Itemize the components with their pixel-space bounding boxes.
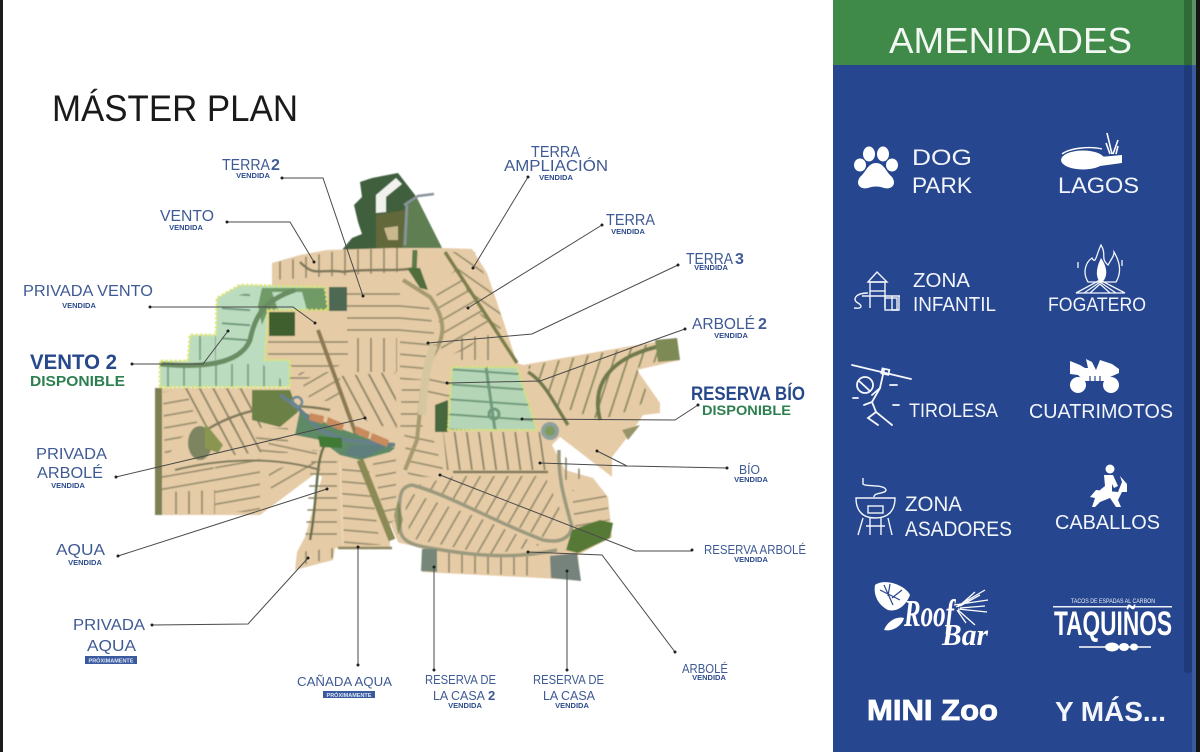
text: y mas: Y MÁS... — [1055, 696, 1166, 727]
label: privada arbole: ARBOLÉ — [37, 463, 103, 482]
label: reserva arbole: VENDIDA — [734, 555, 768, 564]
amenity: cuatrimotos: CUATRIMOTOS — [1029, 401, 1173, 423]
map: lot stripes west — [158, 335, 397, 514]
amenity: zona asadores: ASADORES — [905, 518, 1012, 541]
label: arbole: ARBOLÉ — [682, 661, 728, 676]
label: arbole: VENDIDA — [692, 673, 726, 682]
label: canada aqua: PRÓXIMAMENTE — [327, 691, 372, 699]
label: terra 2: VENDIDA — [236, 171, 270, 180]
map: vento 2 available zone — [160, 285, 347, 387]
amenity: dog park: DOG — [912, 145, 972, 170]
amenity: tirolesa — [852, 365, 998, 425]
label: privada arbole: PRIVADA — [36, 446, 107, 463]
label: terra: TERRA — [606, 212, 655, 229]
label: reserva arbole: RESERVA ARBOLÉ — [704, 542, 806, 557]
label: aqua: AQUA — [56, 542, 105, 559]
label: reserva de la casa 2 — [425, 672, 496, 710]
label: terra ampliacion: TERRA — [531, 144, 580, 161]
amenity: zona asadores — [856, 478, 1012, 541]
logo: taquinos: TACOS DE ESPADAS AL CARBON — [1071, 598, 1155, 605]
label: reserva de la casa: RESERVA DE — [533, 672, 604, 687]
label: terra 3: TERRA — [686, 251, 733, 268]
label: terra 2 — [222, 157, 280, 180]
amenity: lagos: LAGOS — [1058, 173, 1139, 198]
amenity: caballos — [1055, 464, 1160, 534]
label: terra ampliacion — [504, 144, 608, 182]
label: arbole 2: ARBOLÉ — [692, 314, 755, 333]
label: bio: BÍO — [739, 462, 760, 477]
amenity: dog park: PARK — [912, 173, 972, 198]
label: reserva bio disponible: RESERVA BÍO — [691, 383, 805, 405]
label: terra 3: 3 — [735, 251, 744, 268]
label: reserva de la casa: VENDIDA — [555, 701, 589, 710]
panel header — [833, 0, 1196, 65]
map: central plaza with roads and buildings — [280, 395, 395, 460]
label: bio: VENDIDA — [734, 475, 768, 484]
amenity: zona infantil — [854, 270, 996, 316]
map: lot stripes south — [298, 432, 610, 576]
label: vento: VENTO — [160, 208, 214, 225]
map: forest and clubhouse at north — [342, 173, 443, 250]
logo: mini zoo: MINI Zoo — [867, 695, 998, 727]
map: green spines and roads — [175, 250, 572, 556]
label: reserva de la casa — [533, 672, 604, 710]
label: privada aqua: AQUA — [87, 638, 136, 655]
label: aqua — [56, 542, 105, 567]
label: terra ampliacion: VENDIDA — [539, 173, 573, 182]
label: vento: VENDIDA — [169, 223, 203, 232]
logo: roof bar: Roof — [903, 593, 956, 635]
label: reserva bio disponible — [691, 383, 805, 418]
label: privada vento — [23, 283, 153, 310]
label: privada arbole — [36, 446, 107, 490]
amenity: caballos: CABALLOS — [1055, 512, 1160, 534]
label: arbole 2 — [692, 314, 767, 340]
label: arbole 2: VENDIDA — [714, 331, 748, 340]
amenity: lagos — [1058, 133, 1139, 198]
map: east wing lots — [527, 338, 680, 440]
amenity: fogatero: FOGATERO — [1048, 295, 1146, 316]
label: vento 2 disponible — [30, 351, 125, 390]
label: privada aqua: PRÓXIMAMENTE — [89, 656, 134, 664]
label: canada aqua: CAÑADA AQUA — [297, 674, 392, 689]
label: terra: VENDIDA — [611, 227, 645, 236]
map: reserva bio available zone — [448, 367, 537, 430]
map: grey parcels — [421, 422, 612, 581]
label: arbole — [682, 661, 728, 682]
label: canada aqua — [297, 674, 392, 699]
label: privada vento: VENDIDA — [62, 301, 96, 310]
amenity: tirolesa: TIROLESA — [909, 401, 998, 422]
amenity: zona infantil: ZONA — [913, 270, 971, 292]
label: reserva de la casa: LA CASA — [543, 688, 595, 703]
label: terra 3: VENDIDA — [694, 263, 728, 272]
amenity: cuatrimotos — [1029, 359, 1173, 423]
map: tan lot base silhouette — [155, 248, 680, 580]
label: reserva de la casa 2: RESERVA DE — [425, 672, 496, 687]
label: terra 2: 2 — [271, 157, 280, 174]
label: reserva arbole — [704, 542, 806, 564]
panel: amenidades — [833, 0, 1200, 752]
logo: roof bar — [875, 582, 989, 652]
label: privada aqua — [73, 617, 145, 664]
label: privada arbole: VENDIDA — [51, 481, 85, 490]
title: master plan: MÁSTER PLAN — [52, 88, 298, 129]
label: vento 2 disponible: DISPONIBLE — [30, 373, 125, 390]
site map — [155, 173, 680, 581]
label: privada vento: PRIVADA VENTO — [23, 283, 153, 300]
logo: roof bar: Bar — [941, 617, 989, 652]
map labels — [23, 144, 806, 710]
label: bio — [734, 462, 768, 484]
label: reserva bio disponible: DISPONIBLE — [702, 402, 791, 418]
amenity: fogatero — [1048, 245, 1146, 316]
logo: taquinos — [1053, 598, 1172, 652]
panel header: AMENIDADES — [889, 20, 1132, 61]
label: vento 2 disponible: VENTO 2 — [30, 351, 117, 374]
label: privada aqua: PRIVADA — [73, 617, 145, 634]
map: green park areas — [155, 268, 613, 553]
amenity: dog park — [854, 145, 972, 198]
label: reserva de la casa 2: VENDIDA — [448, 701, 482, 710]
label: terra — [606, 212, 655, 236]
label: terra 2: TERRA — [222, 157, 270, 174]
label: terra ampliacion: AMPLIACIÓN — [504, 156, 608, 175]
label: aqua: VENDIDA — [68, 558, 102, 567]
leader lines — [114, 176, 728, 672]
label: reserva de la casa 2: LA CASA — [433, 688, 485, 703]
map: lot stripes north and centre — [272, 248, 505, 435]
amenity: zona asadores: ZONA — [905, 493, 962, 516]
label: arbole 2: 2 — [758, 316, 767, 333]
label: reserva de la casa 2: 2 — [488, 688, 495, 703]
amenity: zona infantil: INFANTIL — [913, 294, 996, 316]
